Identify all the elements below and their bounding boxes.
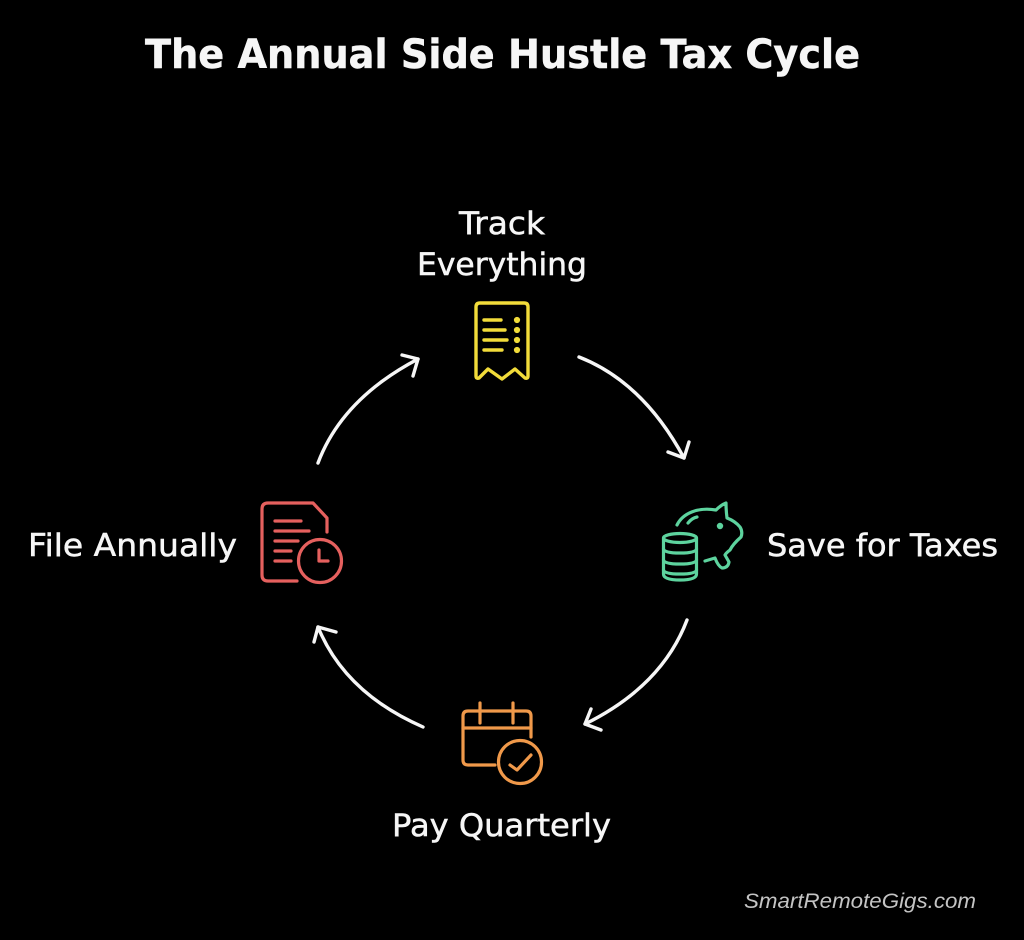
step label: File Annually: File Annually bbox=[28, 528, 237, 564]
step label: Track Everything: Everything bbox=[417, 247, 587, 283]
step label: Track Everything: Track bbox=[458, 206, 545, 242]
step label: Pay Quarterly: Pay Quarterly bbox=[392, 808, 611, 844]
step label: Track Everything bbox=[417, 206, 587, 283]
step label: Save for Taxes: Save for Taxes bbox=[767, 528, 998, 564]
icon: calendar with check bbox=[463, 703, 542, 784]
arrow: file to track bbox=[318, 355, 418, 463]
title: The Annual Side Hustle Tax Cycle bbox=[145, 32, 860, 78]
icon: receipt bbox=[476, 303, 528, 379]
icon: document with clock bbox=[262, 503, 342, 582]
arrow: pay to file bbox=[314, 627, 423, 727]
arrow: track to save bbox=[579, 357, 689, 458]
arrow: save to pay bbox=[585, 620, 687, 730]
icon: piggy bank with coins bbox=[664, 503, 742, 580]
watermark: SmartRemoteGigs.com bbox=[744, 890, 976, 913]
